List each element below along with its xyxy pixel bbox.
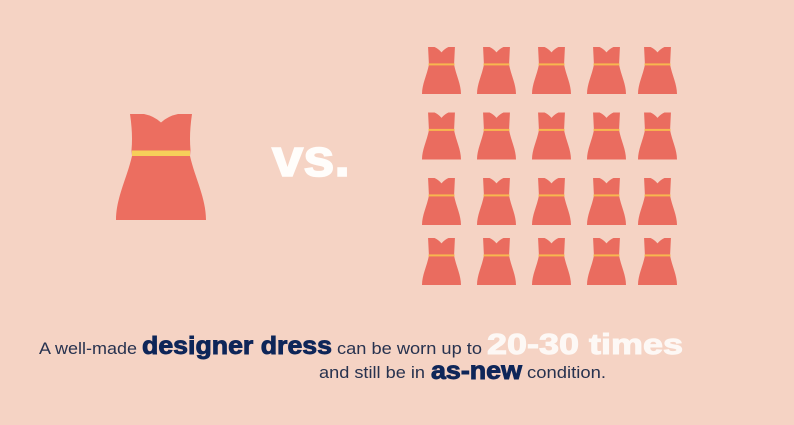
grid of twenty small dresses: [422, 47, 677, 285]
caption line 1: can be worn up to: [337, 340, 482, 358]
row 1 of dresses: [422, 47, 677, 94]
caption line 2: and still be in: [319, 364, 425, 382]
caption line 2: [319, 357, 606, 385]
caption line 1: 20-30 times: [487, 329, 683, 361]
row 3 of dresses: [422, 178, 677, 225]
caption line 1: A well-made: [39, 340, 137, 358]
caption line 2: as-new: [431, 357, 523, 385]
row 2 of dresses: [422, 112, 677, 160]
icon: large designer dress: [116, 114, 206, 220]
caption text: [39, 329, 683, 385]
caption line 2: condition.: [527, 364, 606, 382]
caption line 1: designer dress: [142, 332, 332, 360]
row 4 of dresses: [422, 238, 677, 285]
caption line 1: [39, 329, 683, 361]
vs. label: vs.: [272, 129, 350, 188]
